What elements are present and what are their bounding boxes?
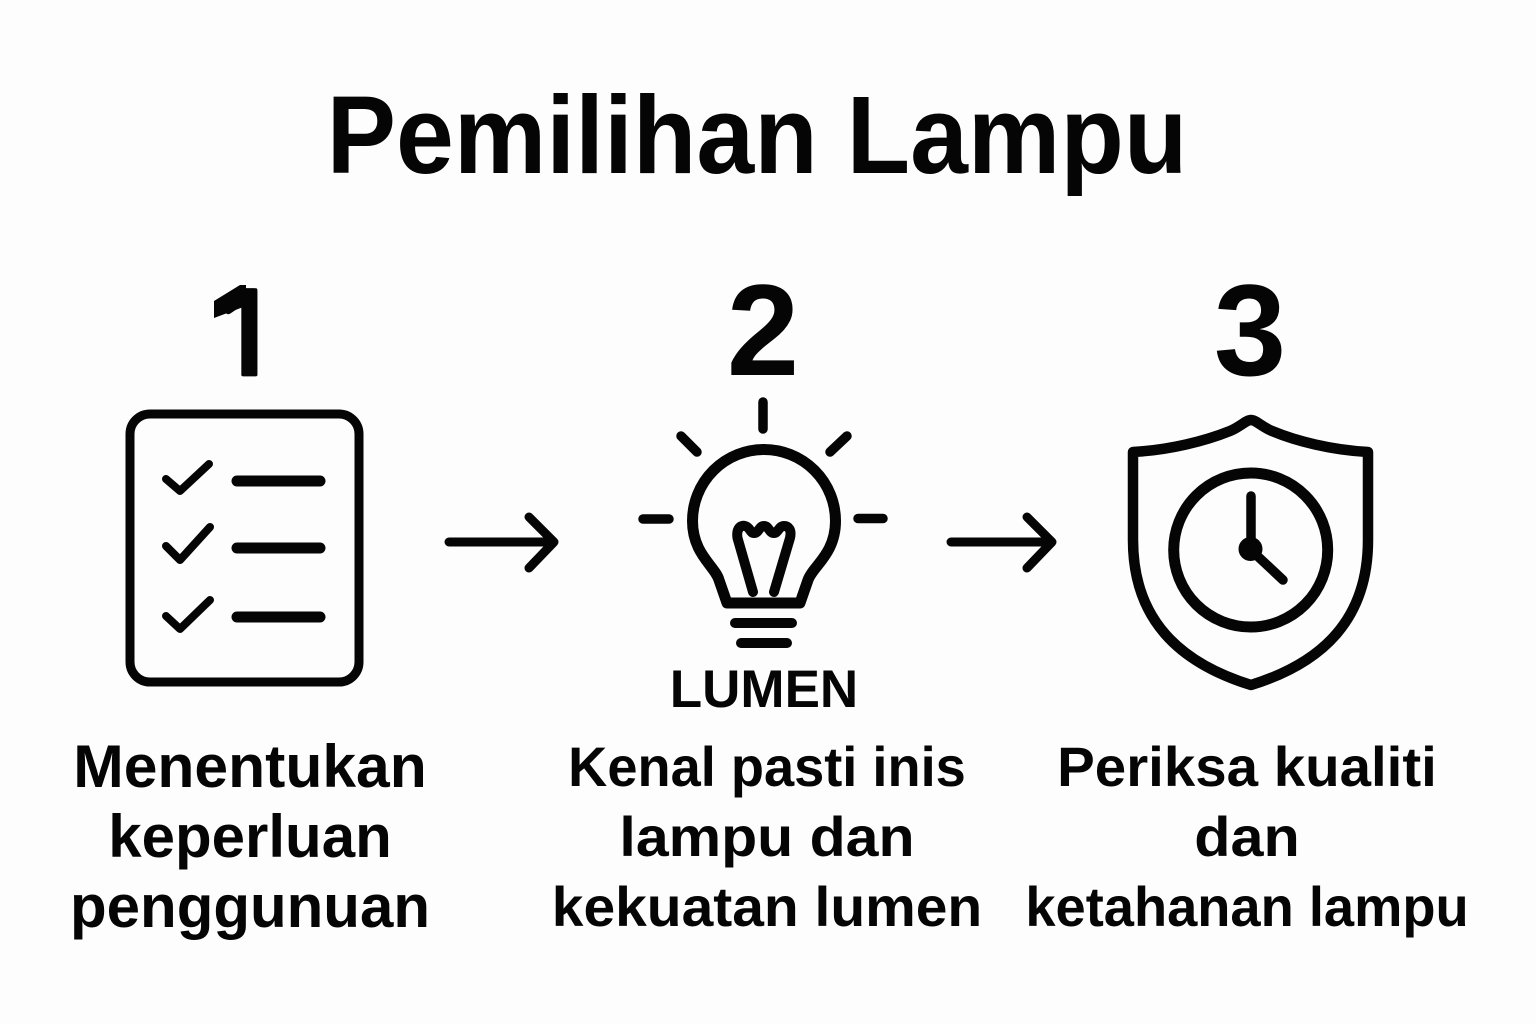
text: step 2 description: Kenal pasti inis: [568, 735, 966, 798]
text: step 3 description: dan: [1194, 805, 1300, 868]
text: step 2 description: kekuatan lumen: [552, 875, 982, 938]
text: step 3 description: [1025, 735, 1469, 938]
text: step 1 description: penggunuan: [70, 873, 430, 940]
text: step 1 description: [70, 733, 430, 940]
title: Pemilihan Lampu: [327, 74, 1187, 197]
text: step 2 description: lampu dan: [619, 805, 915, 868]
text: step 2 description: [552, 735, 982, 938]
text: step 3 description: ketahanan lampu: [1025, 875, 1469, 938]
text: step 3 description: Periksa kualiti: [1057, 735, 1437, 798]
text: step 1 description: keperluan: [108, 803, 392, 870]
step number 3: 3: [1214, 257, 1286, 403]
step number 1: 1: [200, 279, 292, 394]
step number 2: 2: [727, 257, 799, 403]
text: step 1 description: Menentukan: [73, 733, 427, 800]
lumen label: LUMEN: [670, 660, 858, 719]
